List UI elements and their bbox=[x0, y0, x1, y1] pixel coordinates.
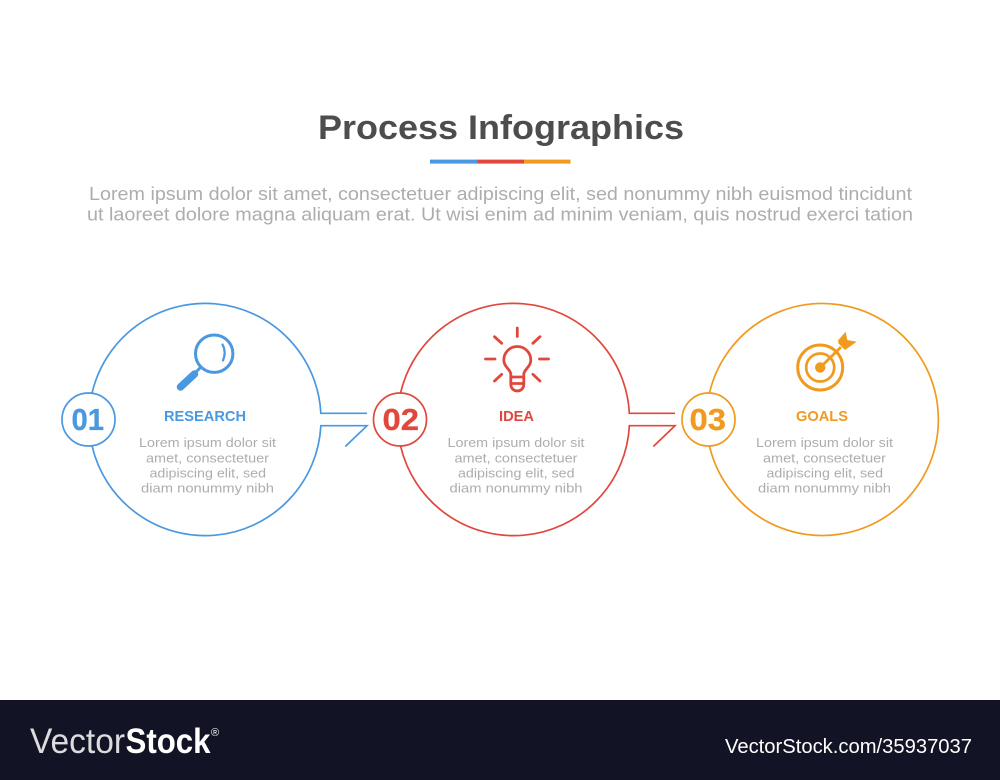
icon: magnifying glass bbox=[180, 335, 233, 387]
body text: diam nonummy nibh bbox=[450, 480, 582, 496]
body text: Lorem ipsum dolor sit bbox=[756, 435, 893, 450]
heading: research: RESEARCH bbox=[164, 408, 246, 425]
number badge 02 bbox=[374, 393, 426, 446]
icon: target with arrow bbox=[798, 332, 857, 390]
number badge 02: 02 bbox=[382, 402, 419, 437]
image id: VectorStock.com/35937037 bbox=[725, 736, 972, 758]
panel: step 3 goals bbox=[682, 304, 938, 536]
heading: goals: GOALS bbox=[796, 408, 848, 425]
number badge 01: 01 bbox=[72, 402, 104, 437]
intro text: Lorem ipsum dolor sit amet, consectetuer adipiscing elit, sed nonummy nibh euismod tincidunt bbox=[89, 184, 912, 204]
body text: amet, consectetuer bbox=[763, 450, 887, 466]
body text bbox=[448, 435, 585, 496]
icon: light bulb bbox=[486, 328, 548, 391]
body text: diam nonummy nibh bbox=[141, 480, 274, 496]
number badge 03: 03 bbox=[690, 402, 726, 437]
title underline bbox=[430, 160, 570, 164]
body text: amet, consectetuer bbox=[146, 450, 270, 466]
body text: adipiscing elit, sed bbox=[150, 466, 266, 480]
footer band bbox=[0, 700, 1000, 780]
number badge 01 bbox=[62, 393, 115, 446]
body text: Lorem ipsum dolor sit bbox=[448, 435, 585, 450]
logo wordmark: Stock bbox=[126, 722, 211, 761]
body text bbox=[139, 435, 276, 496]
body text bbox=[756, 435, 893, 496]
intro text bbox=[87, 184, 913, 224]
title: Process Infographics bbox=[318, 109, 684, 147]
ring and arrow connector bbox=[401, 303, 675, 536]
logo wordmark bbox=[30, 722, 219, 761]
logo wordmark: Vector bbox=[30, 722, 125, 761]
body text: diam nonummy nibh bbox=[758, 480, 891, 496]
ring bbox=[710, 304, 938, 536]
body text: adipiscing elit, sed bbox=[766, 466, 883, 480]
intro text: ut laoreet dolore magna aliquam erat. Ut wisi enim ad minim veniam, quis nostrud exerci tation bbox=[87, 204, 913, 224]
logo wordmark: ® bbox=[211, 727, 219, 739]
number badge 03 bbox=[682, 393, 735, 446]
panel: step 2 idea bbox=[374, 303, 675, 536]
heading: idea: IDEA bbox=[499, 408, 534, 425]
body text: amet, consectetuer bbox=[454, 450, 578, 466]
body text: Lorem ipsum dolor sit bbox=[139, 435, 276, 450]
body text: adipiscing elit, sed bbox=[458, 466, 574, 480]
panel: step 1 research bbox=[62, 303, 367, 536]
ring and arrow connector bbox=[92, 303, 367, 536]
